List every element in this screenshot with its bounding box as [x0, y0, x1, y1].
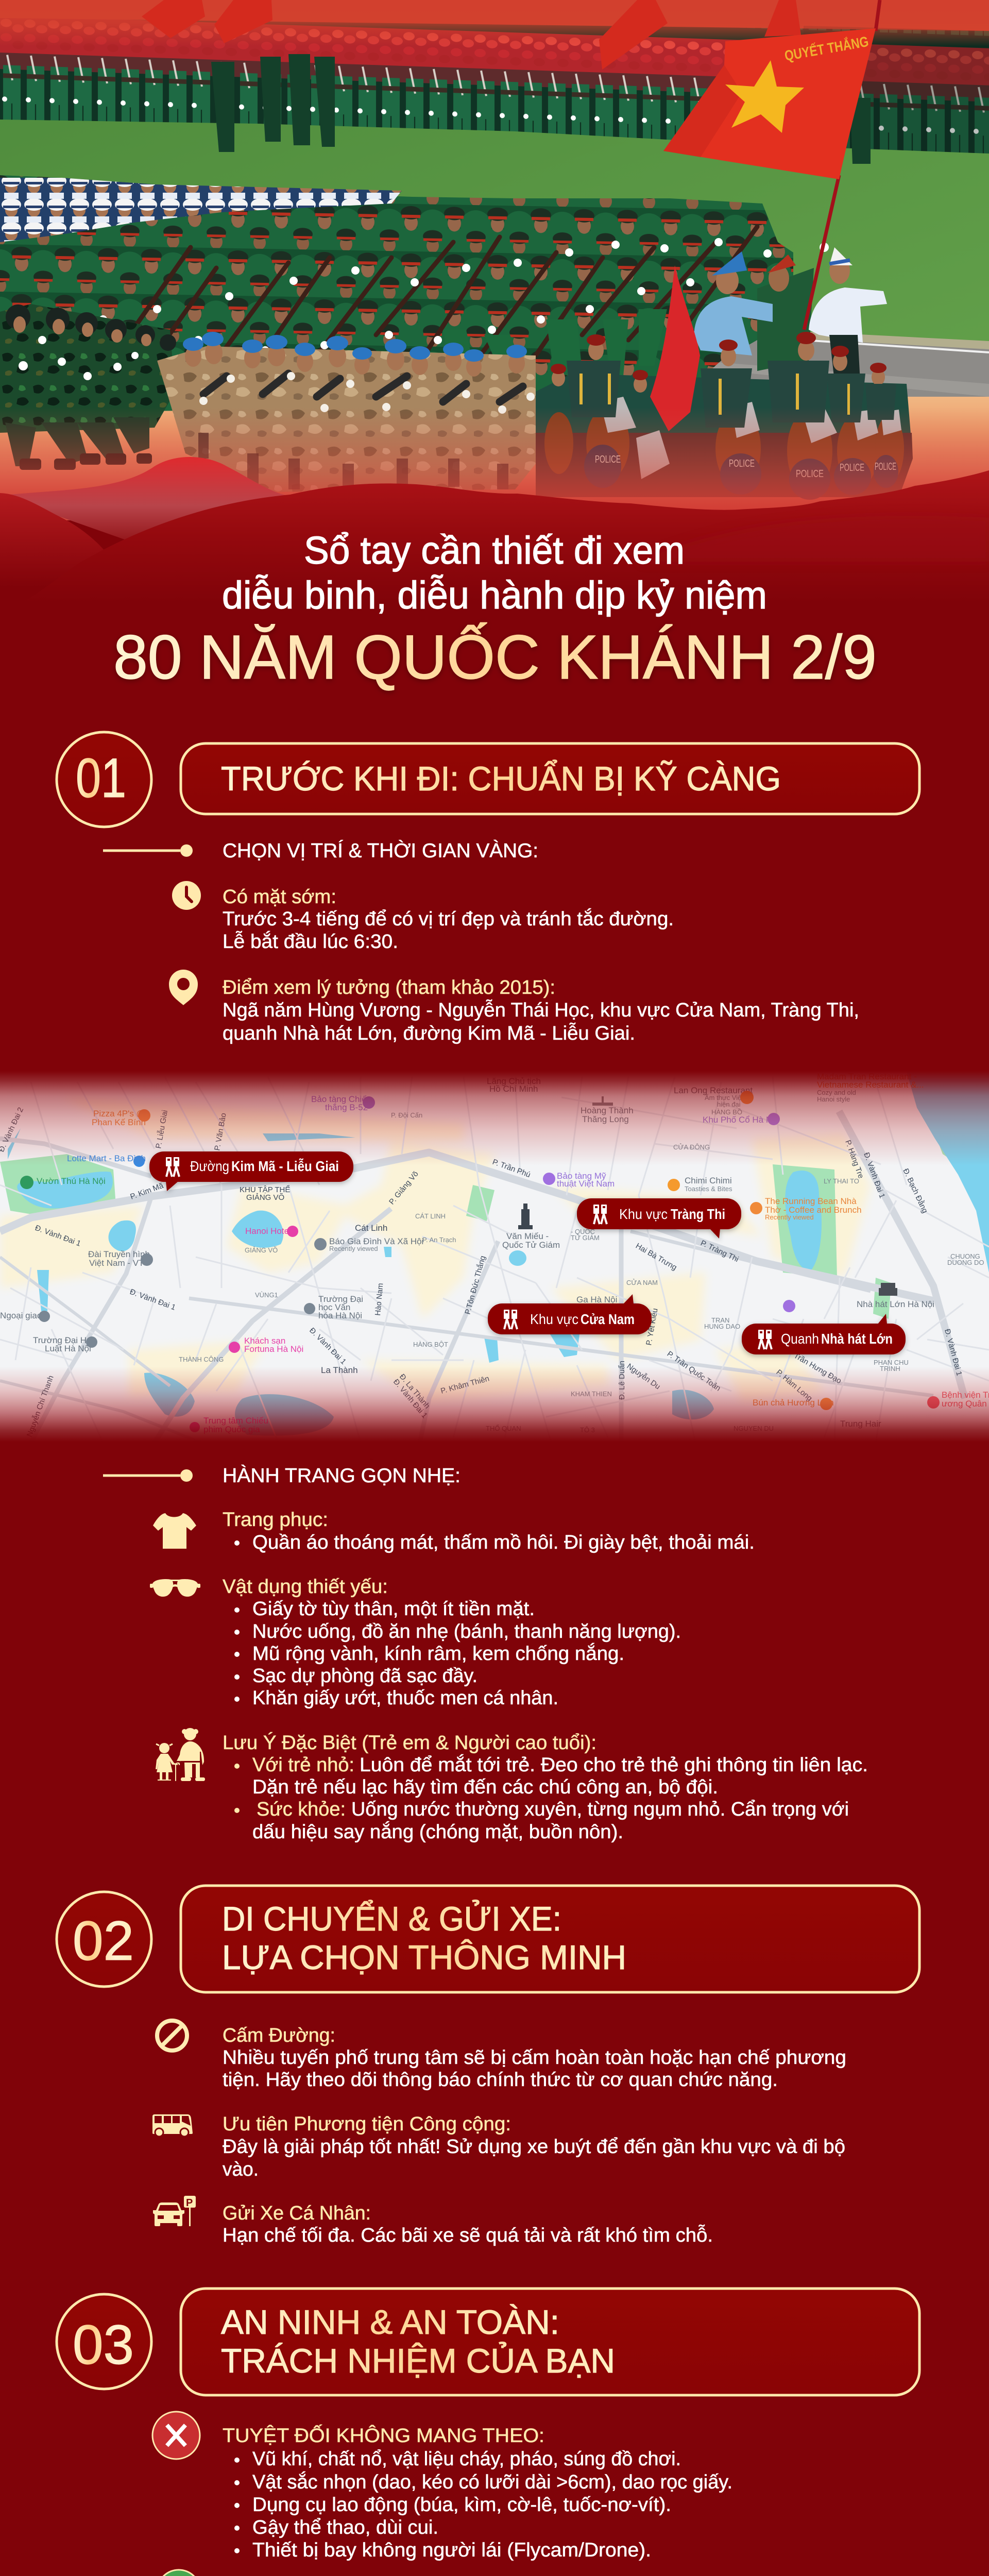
bottom haze — [0, 407, 989, 510]
map place labels: Khách sạn — [244, 1336, 285, 1346]
text block: ideal viewing points — [223, 977, 859, 1044]
text block: clothing: Quần áo thoáng mát, thấm mồ hôi. Đi giày bệt, thoải mái. — [252, 1532, 755, 1553]
map place labels: Lotte Mart - Ba Đình — [67, 1154, 146, 1163]
map place labels: Ga Hà Nội — [576, 1295, 617, 1304]
text block: essentials: Khăn giấy ướt, thuốc men cá nhân. — [252, 1687, 558, 1709]
map place labels: Quốc Tử Giám — [502, 1240, 560, 1250]
text block: road closures: Nhiều tuyến phố trung tâm sẽ bị cấm hoàn toàn hoặc hạn chế phương — [223, 2047, 846, 2069]
icon: car with parking sign — [153, 2196, 196, 2226]
map place labels: NGUYEN DU — [734, 1425, 774, 1432]
map place labels: Bảo tàng Mỹ — [557, 1171, 606, 1181]
map place labels: Đài Truyền hình — [88, 1249, 150, 1259]
map place labels: Trung tâm Chiếu — [203, 1416, 268, 1426]
map place labels: TRAN — [711, 1316, 729, 1324]
dark camo soldiers on left — [0, 304, 176, 470]
map place labels: Đ. Lê Duẩn — [618, 1361, 626, 1400]
text block: essentials: Giấy tờ tùy thân, một ít tiền mặt. — [252, 1598, 535, 1620]
text block: private parking: Hạn chế tối đa. Các bãi xe sẽ quá tải và rất khó tìm chỗ. — [223, 2224, 713, 2246]
map of viewing areas — [0, 1061, 989, 1448]
heading panel 03 — [181, 2289, 919, 2395]
map label: Nhà hát Lớn: Nhà hát Lớn — [821, 1331, 893, 1347]
text block: special notes — [223, 1732, 868, 1843]
map place labels: LY THAI TO — [824, 1177, 859, 1185]
map place labels: Ẩm thực Việt — [705, 1094, 743, 1101]
map place labels: Đ. Vành Đai 1 — [943, 1328, 964, 1377]
map label: Tràng Thi: Tràng Thi — [671, 1206, 725, 1222]
map place labels: CỬA NAM — [626, 1279, 658, 1286]
map place labels: CHUONG — [950, 1252, 980, 1260]
map place labels: HUNG DAO — [704, 1323, 740, 1330]
map place labels: thuật Việt Nam — [557, 1179, 615, 1189]
title: Sổ tay cần thiết đi xem — [304, 529, 685, 572]
rifles — [118, 227, 757, 366]
icon: location pin — [169, 970, 198, 1005]
map place labels: Đ. Vành Đai 1 — [34, 1224, 82, 1248]
text block: private parking: Gửi Xe Cá Nhân: — [223, 2202, 371, 2224]
text block: special notes: Dặn trẻ nếu lạc hãy tìm đến các chú công an, bộ đội. — [252, 1776, 718, 1798]
text block: prohibited items: Vũ khí, chất nổ, vật liệu cháy, pháo, súng đồ chơi. — [252, 2448, 681, 2470]
map place labels: P. Trần Quốc Toản — [666, 1349, 722, 1393]
map main roads — [0, 1111, 965, 1443]
map place labels: P. Liễu Giai — [154, 1109, 169, 1149]
text block: special notes: Với trẻ nhỏ: — [252, 1754, 354, 1776]
map label: Cửa Nam: Khu vực — [530, 1311, 578, 1327]
heading panel 03: AN NINH & AN TOÀN: — [221, 2303, 559, 2341]
subheading: packing light — [103, 1465, 461, 1487]
text block: clothing: Trang phục: — [223, 1509, 328, 1531]
heading panel 02 — [181, 1886, 919, 1992]
icon: t-shirt — [153, 1513, 196, 1549]
map place labels: PHAN CHU — [874, 1359, 909, 1366]
gloves — [99, 238, 772, 354]
map green areas — [0, 1146, 947, 1319]
text block: prohibited items: Vật sắc nhọn (dao, kéo có lưỡi dài >6cm), dao rọc giấy. — [252, 2471, 732, 2493]
mounted police cavalry — [536, 332, 913, 500]
map place labels: CÁT LINH — [415, 1212, 446, 1220]
map place labels: P. Trần Phú — [491, 1158, 532, 1179]
map place labels: Đ. Bạch Đằng — [901, 1167, 929, 1214]
text block: special notes: Sức khỏe: — [257, 1799, 346, 1820]
map place labels: hiện đại — [717, 1100, 741, 1108]
heading panel 02: LỰA CHỌN THÔNG MINH — [222, 1938, 626, 1976]
map place labels: CỬA ĐÔNG — [673, 1143, 710, 1151]
text block: prohibited items: Thiết bị bay không người lái (Flycam/Drone). — [252, 2539, 651, 2561]
map place labels: thắng B-52 — [325, 1103, 368, 1112]
map place labels: P. Hàm Long — [774, 1368, 814, 1403]
text block: ideal viewing points: quanh Nhà hát Lớn, đường Kim Mã - Liễu Giai. — [223, 1022, 635, 1044]
map place labels: Fortuna Hà Nội — [244, 1344, 303, 1354]
map place labels: THÀNH CÔNG — [179, 1355, 224, 1363]
text block: clothing — [223, 1509, 755, 1553]
map place labels: Hanoi style — [817, 1095, 850, 1103]
heading panel 01 — [181, 743, 919, 814]
map label: Tràng Thi — [577, 1198, 741, 1239]
dark shading on right of back row — [804, 26, 989, 154]
text block: prohibited items: TUYỆT ĐỐI KHÔNG MANG THEO: — [223, 2424, 544, 2447]
icon: red cross — [152, 2412, 200, 2459]
map place labels: VÙNG1 — [255, 1291, 278, 1299]
text block: arrive early — [223, 886, 674, 953]
map place labels: Bún chả Hương Liên — [753, 1398, 834, 1408]
text block: prohibited items: Dụng cụ lao động (búa, kìm, cờ-lê, tuốc-nơ-vít). — [252, 2494, 671, 2516]
map top and bottom red fade — [0, 1061, 989, 1448]
map place labels: Recently viewed — [329, 1245, 378, 1252]
heading panel 03: TRÁCH NHIỆM CỦA BẠN — [221, 2342, 615, 2380]
white hat sailors — [0, 178, 402, 242]
map place labels: Pizza 4P's @ — [93, 1109, 145, 1118]
map place labels: P. Đội Cấn — [391, 1111, 422, 1119]
map label: Kim Mã - Liễu Giai: Đường — [190, 1158, 229, 1174]
police labels: POLICE — [729, 458, 755, 469]
icon: sunglasses — [150, 1579, 200, 1597]
police labels: POLICE — [595, 454, 621, 465]
map place labels: Trung Hair — [840, 1419, 881, 1429]
map place labels: Khu Phố Cổ Hà Nội — [703, 1115, 779, 1125]
map place labels: Hanoi Hotel — [245, 1226, 291, 1236]
map place labels: The Running Bean Nhà — [765, 1196, 857, 1206]
map place labels: - QUỐC — [571, 1228, 595, 1235]
number badge 01: 01 — [76, 747, 126, 809]
map place labels: TỬ GIÁM — [571, 1234, 600, 1242]
back row of soldiers — [0, 18, 989, 154]
map place labels: Văn Miếu - — [506, 1231, 549, 1241]
foreground standing officers — [211, 54, 871, 164]
text block: road closures — [223, 2025, 846, 2091]
police labels: POLICE — [875, 461, 896, 472]
subheading: packing light: HÀNH TRANG GỌN NHẸ: — [223, 1465, 461, 1487]
text block: essentials: Sạc dự phòng đã sạc đầy. — [252, 1665, 478, 1687]
map place labels: Vườn Thú Hà Nội — [37, 1176, 106, 1186]
map place labels: P.Tôn Đức Thắng — [463, 1255, 487, 1315]
text block: prohibited items: Gậy thể thao, dùi cui. — [252, 2517, 438, 2538]
map place labels: Chimi Chimi — [685, 1176, 732, 1185]
heading panel 02: DI CHUYỂN & GỬI XE: — [222, 1900, 561, 1938]
map place labels: Recently viewed — [765, 1213, 814, 1221]
map place labels: GIẢNG VÕ — [245, 1246, 278, 1254]
text block: essentials: Mũ rộng vành, kính râm, kem chống nắng. — [252, 1642, 624, 1665]
top red haze — [0, 0, 989, 46]
police labels — [595, 454, 896, 480]
green trouser legs — [443, 309, 667, 381]
red wave left fold — [0, 493, 258, 608]
map place labels: P. Tràng Thi — [699, 1239, 740, 1264]
icon: no entry — [157, 2021, 187, 2050]
icon: car with parking sign: P — [186, 2197, 193, 2209]
map place labels: Việt Nam - VTV — [89, 1258, 150, 1268]
map place labels: Nhà hát Lớn Hà Nội — [857, 1299, 934, 1309]
map place labels: phim Quốc gia — [203, 1425, 260, 1434]
text block: private parking — [223, 2202, 713, 2246]
map markers — [20, 1091, 940, 1432]
text block: special notes: Uống nước thường xuyên, từng ngụm nhỏ. Cẩn trọng với — [351, 1799, 849, 1820]
map place labels: Nguyễn Chí Thanh — [25, 1374, 56, 1438]
text block: ideal viewing points: Điểm xem lý tưởng (tham khảo 2015): — [223, 977, 555, 998]
map place labels: Toasties & Bites — [685, 1185, 732, 1193]
map place labels: hóa Hà Nội — [318, 1311, 362, 1320]
map beige districts — [0, 1097, 871, 1401]
map label: Cửa Nam: Cửa Nam — [581, 1311, 635, 1327]
map place labels: THỔ QUAN — [486, 1425, 521, 1432]
police labels: POLICE — [840, 462, 864, 473]
map place labels: Báo Gia Đình Và Xã Hội — [329, 1236, 423, 1246]
map place labels: P. An Trạch — [422, 1236, 456, 1244]
text block: special notes: dấu hiệu say nắng (chóng mặt, buồn nôn). — [252, 1821, 623, 1843]
map place labels: học Văn — [318, 1302, 350, 1312]
number badge 03: 03 — [73, 2313, 134, 2376]
map label: Nhà hát Lớn: Quanh — [781, 1331, 819, 1347]
text block: ideal viewing points: Ngã năm Hùng Vương - Nguyễn Thái Học, khu vực Cửa Nam, Tràng Thi, — [223, 999, 859, 1021]
map label: Kim Mã - Liễu Giai — [149, 1151, 353, 1191]
map place labels: Ngoại giao — [0, 1311, 42, 1320]
icon: bus — [152, 2114, 193, 2137]
big red flag with star: QUYẾT THẮNG — [783, 33, 870, 64]
map place labels: Phan Kế Bính — [92, 1117, 146, 1127]
map label: Tràng Thi: Khu vực — [619, 1206, 668, 1222]
icon: green check — [157, 2570, 200, 2576]
map base — [0, 1061, 989, 1448]
map place labels: TRINH — [880, 1365, 900, 1372]
big flag pole — [804, 0, 880, 330]
map place labels: Đ. Vành Đai 1 — [308, 1326, 348, 1366]
hero photo: military parade — [0, 0, 989, 618]
map place labels: Lan Ong Restaurant — [674, 1086, 753, 1095]
green uniform troops block — [0, 175, 793, 412]
subheading: golden place and time: CHỌN VỊ TRÍ & THỜI GIAN VÀNG: — [223, 840, 538, 862]
map minor roads — [0, 1077, 989, 1443]
text block: prohibited items — [223, 2424, 732, 2561]
section 01 header — [57, 732, 919, 827]
map place labels: Trường Đại — [318, 1294, 363, 1304]
map place labels: Thờ - Coffee and Brunch — [765, 1205, 862, 1215]
text block: public transport — [223, 2113, 845, 2180]
map place labels: KHAM THIEN — [571, 1390, 612, 1398]
map place labels: Thăng Long — [582, 1114, 629, 1124]
map place labels: Hoàng Thành — [581, 1106, 634, 1115]
text block: essentials: Vật dụng thiết yếu: — [223, 1576, 388, 1598]
number badge 03 — [57, 2294, 151, 2389]
map place labels: Trần Hưng Đạo — [792, 1351, 843, 1385]
text block: arrive early: Trước 3-4 tiếng để có vị trí đẹp và tránh tắc đường. — [223, 908, 674, 930]
text block: arrive early: Lễ bắt đầu lúc 6:30. — [223, 930, 398, 953]
text block: public transport: Đây là giải pháp tốt nhất! Sử dụng xe buýt để đến gần khu vực và đi bộ — [223, 2136, 845, 2158]
icon: child and elderly — [156, 1728, 205, 1781]
map place labels: HÀNG BỘT — [413, 1341, 448, 1348]
map place labels: TÔ 3 — [580, 1426, 595, 1434]
map place labels: Hai Bà Trưng — [634, 1242, 678, 1272]
title: 80 NĂM QUỐC KHÁNH 2/9 — [113, 622, 877, 692]
map place labels: P. Văn Bảo — [213, 1112, 228, 1151]
map label: Kim Mã - Liễu Giai: Kim Mã - Liễu Giai — [231, 1158, 339, 1174]
honor guard in blue and white — [694, 243, 887, 381]
number badge 02 — [57, 1892, 151, 1987]
map place labels: GIẢNG VÕ — [246, 1193, 284, 1202]
number badge 01 — [57, 732, 151, 827]
text block: public transport: vào. — [223, 2159, 259, 2180]
wave highlight fold right — [639, 516, 989, 562]
background flags — [142, 0, 801, 70]
text block: special notes: Luôn để mắt tới trẻ. Đeo cho trẻ thẻ ghi thông tin liên lạc. — [360, 1754, 868, 1776]
map place labels: Lăng Chủ tịch — [487, 1076, 541, 1086]
map place labels: Hồ Chí Minh — [489, 1084, 538, 1094]
number badge 02: 02 — [73, 1909, 134, 1972]
map place labels: DUONG DO — [947, 1259, 984, 1266]
map label: Cửa Nam — [488, 1294, 652, 1334]
map place labels: KHU TẬP THỂ — [240, 1185, 290, 1194]
heading panel 01: TRƯỚC KHI ĐI: CHUẨN BỊ KỸ CÀNG — [221, 759, 781, 798]
map place labels: Đ. Vành Đai 1 — [129, 1287, 177, 1312]
title: diễu binh, diễu hành dịp kỷ niệm — [222, 573, 767, 617]
text block: special notes: Lưu Ý Đặc Biệt (Trẻ em & Người cao tuổi): — [223, 1732, 596, 1754]
map place labels: P. Kim Mã — [129, 1181, 165, 1201]
map place labels: P. Giảng Võ — [387, 1170, 420, 1207]
map place labels: Nguyễn Du — [625, 1362, 662, 1391]
red wave hump left — [0, 457, 290, 546]
map place labels: P. Khâm Thiên — [440, 1374, 490, 1396]
map place labels: Bảo tàng Chiến — [311, 1094, 371, 1104]
map place labels: Cozy and old — [817, 1089, 856, 1096]
text block: arrive early: Có mặt sớm: — [223, 886, 336, 908]
map place labels: HÀNG BỒ — [711, 1108, 742, 1116]
parade field and sky — [0, 0, 989, 520]
map place labels: Đ. Vành Đai 1 — [862, 1151, 886, 1199]
map place labels: Cát Linh — [355, 1223, 387, 1233]
map place labels: P. Yết Kiêu — [644, 1308, 660, 1346]
section 03 header — [57, 2289, 919, 2395]
icon: clock — [172, 881, 201, 910]
text block: essentials — [223, 1576, 681, 1709]
map water bodies — [8, 1072, 989, 1436]
map place labels: Đ. Vành Đai 1 — [391, 1378, 429, 1420]
map label: Nhà hát Lớn — [742, 1314, 906, 1354]
map place labels: Trường Đại Học — [33, 1335, 96, 1345]
section 02 header — [57, 1886, 919, 1992]
map place labels: Đ. La Thành — [398, 1372, 432, 1411]
text block: road closures: Cấm Đường: — [223, 2025, 335, 2046]
map place labels: Hào Nam — [373, 1283, 385, 1316]
text block: public transport: Ưu tiên Phương tiện Công cộng: — [223, 2113, 511, 2135]
red wave main — [0, 470, 989, 618]
map place labels: Vietnamese Restaurant &... — [817, 1080, 924, 1090]
police labels: POLICE — [796, 468, 824, 480]
peacekeeper camo soldiers — [157, 332, 536, 492]
map place labels: La Thành — [321, 1365, 358, 1375]
title — [113, 529, 877, 692]
map place labels — [0, 1072, 989, 1438]
big red flag with star — [663, 28, 876, 179]
map place labels: Madam Tran Restaurant - — [817, 1072, 917, 1081]
small vertical red flag — [650, 265, 700, 431]
map place labels: Luật Hà Nội — [45, 1344, 91, 1353]
text block: essentials: Nước uống, đồ ăn nhẹ (bánh, thanh năng lượng). — [252, 1621, 681, 1642]
text block: road closures: tiện. Hãy theo dõi thông báo chính thức từ cơ quan chức năng. — [223, 2069, 778, 2091]
map place labels: P. Hàng Tre — [843, 1139, 865, 1180]
